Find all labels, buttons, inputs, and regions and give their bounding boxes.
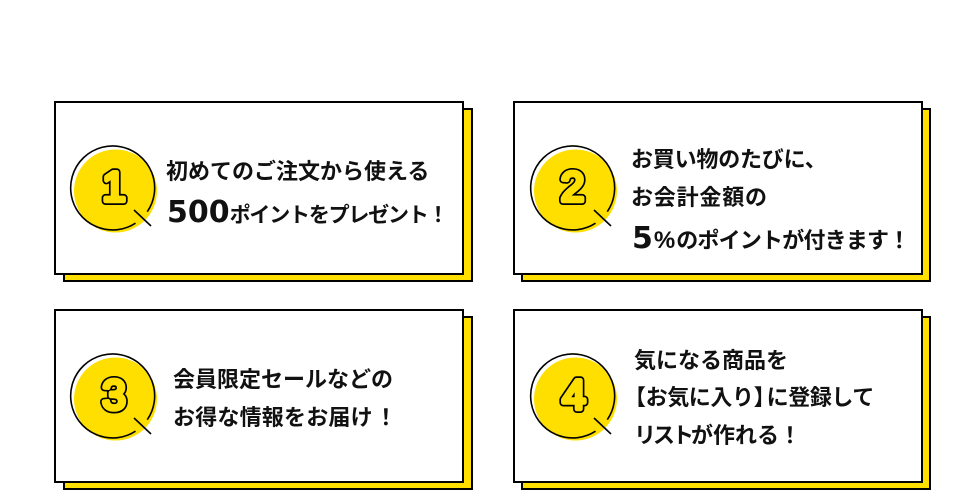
icon: number badge 2: 2 (561, 163, 584, 210)
panel: benefit 4 (513, 309, 931, 490)
text: second line: 500ポイントをプレゼント！ (167, 195, 447, 230)
icon: number badge 2: 2 (561, 163, 584, 210)
text: third line: リストが作れる！ (634, 418, 801, 450)
text: first line: 初めてのご注文から使える (166, 154, 429, 186)
icon: number badge 3: 3 (102, 371, 126, 418)
icon: number badge 4: 4 (562, 371, 586, 418)
text: second line: お得な情報をお届け！ (173, 400, 397, 432)
icon: number badge 1: 1 (102, 163, 126, 210)
text: first line: 会員限定セールなどの (173, 362, 393, 394)
text: first line: お買い物のたびに、 (631, 142, 827, 174)
icon: number badge 2 (530, 145, 617, 232)
icon: number badge 4: 4 (562, 371, 586, 418)
text: second line: 【お気に入り】に登録して (624, 380, 874, 412)
panel: benefit 3 (54, 309, 473, 490)
text: second line: お会計金額の (631, 180, 768, 212)
text: first line: 気になる商品を (634, 343, 788, 375)
text: third line: 5%のポイントが付きます！ (632, 221, 909, 256)
panel: benefit 1 (54, 101, 473, 282)
icon: number badge 4 (530, 353, 617, 440)
panel: benefit 2 (513, 101, 931, 282)
icon: number badge 3: 3 (102, 371, 126, 418)
icon: number badge 1: 1 (102, 163, 126, 210)
icon: number badge 3 (70, 353, 157, 440)
icon: number badge 1 (70, 145, 157, 232)
